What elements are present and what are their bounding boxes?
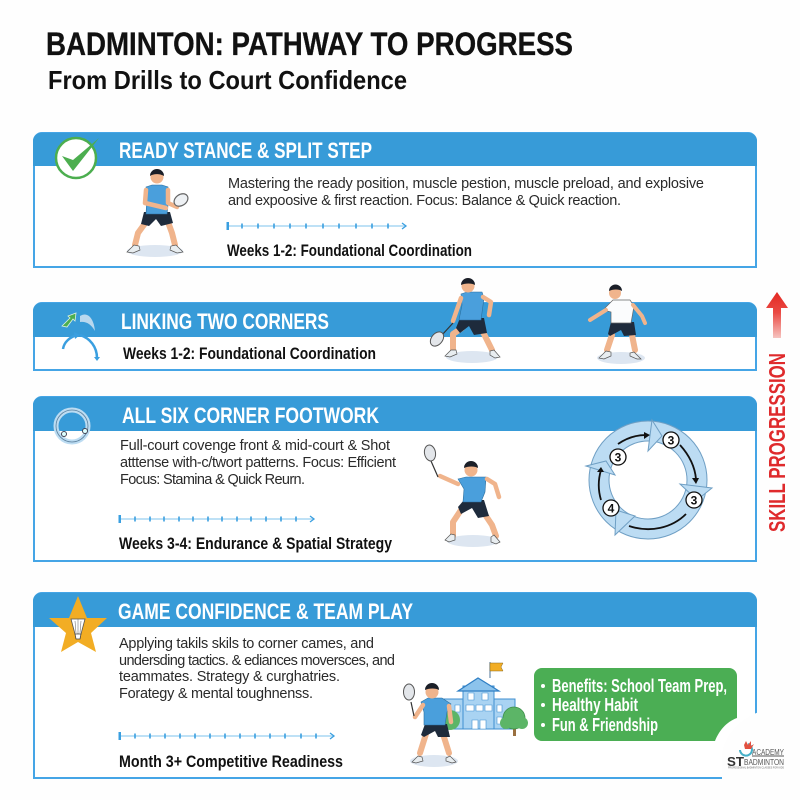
duration label: Weeks 3-4: Endurance & Spatial Strategy — [119, 535, 393, 553]
player in ready stance — [127, 169, 190, 257]
benefits box: Benefits: School Team Prep, — [552, 676, 727, 696]
icon: star with shuttlecock — [49, 596, 107, 652]
panel: game confidence and team play: undersding tactics. & ediances moversces, and — [119, 653, 395, 669]
logo: ST Badminton Academy: BADMINTON — [744, 758, 784, 767]
icon: green check badge — [56, 138, 99, 178]
duration label: Weeks 1-2: Foundational Coordination — [123, 345, 376, 363]
logo backdrop — [722, 712, 800, 781]
benefits box: Healthy Habit — [552, 695, 638, 715]
cycle diagram: 3 — [668, 434, 675, 448]
panel: all six corner footwork: Focus: Stamina & Quick Reurn. — [120, 472, 305, 488]
panel: game confidence and team play — [33, 593, 757, 778]
panel: linking two corners — [33, 278, 757, 370]
cycle diagram: 3 — [615, 450, 622, 464]
direction arrows — [599, 435, 696, 529]
timeline arrow — [226, 222, 406, 230]
benefits box — [534, 668, 737, 741]
benefits box: Fun & Friendship — [552, 715, 658, 735]
logo: ST Badminton Academy: PROFESSIONAL BADMINTON CLASSES FOR KIDS — [728, 766, 784, 770]
subtitle: From Drills to Court Confidence — [48, 65, 407, 95]
player in white shirt — [590, 285, 645, 364]
logo: ST Badminton Academy — [727, 741, 785, 770]
heading: all six corner footwork: ALL SIX CORNER FOOTWORK — [122, 403, 379, 428]
heading: linking two corners: LINKING TWO CORNERS — [121, 309, 329, 334]
panel: ready stance and split step: and expoosive & first reaction. Focus: Balance & Quick reaction. — [228, 193, 621, 209]
panel: all six corner footwork: atttense with-c/twort patterns. Focus: Efficient — [120, 455, 396, 471]
timeline arrow — [118, 732, 334, 740]
cycle diagram — [586, 420, 712, 539]
timeline arrow — [118, 515, 314, 523]
tree — [440, 707, 528, 736]
panel: game confidence and team play: Forategy & mental toughnenss. — [119, 686, 313, 702]
panel: game confidence and team play: teammates. Strategy & curghatries. — [119, 669, 340, 685]
player with racket at school — [404, 683, 458, 767]
description text: Mastering the ready position, muscle pestion, muscle preload, and explosive — [228, 176, 704, 192]
icon: corner arrows — [62, 313, 100, 361]
title: BADMINTON: PATHWAY TO PROGRESS — [46, 26, 573, 62]
description text: Applying takils skils to corner cames, and — [119, 636, 374, 652]
logo: ST Badminton Academy: ST — [727, 754, 744, 769]
logo: ST Badminton Academy: ACADEMY — [752, 748, 785, 757]
player lunging with racket — [428, 278, 500, 363]
panel: all six corner footwork — [33, 397, 757, 561]
duration label: Weeks 1-2: Foundational Coordination — [227, 242, 472, 260]
cycle diagram: 3 — [691, 494, 698, 508]
school building — [442, 662, 515, 729]
panel: ready stance and split step — [33, 133, 757, 267]
skill progression arrow — [766, 292, 788, 338]
number badges — [603, 432, 702, 516]
heading: game confidence: GAME CONFIDENCE & TEAM PLAY — [118, 599, 413, 624]
player reaching with racket — [423, 444, 500, 547]
description text: Full-court covenge front & mid-court & Shot — [120, 438, 390, 454]
duration label: Month 3+ Competitive Readiness — [119, 753, 343, 771]
cycle diagram: 4 — [608, 502, 615, 516]
icon: ring of arrows — [56, 410, 88, 442]
heading: ready stance: READY STANCE & SPLIT STEP — [119, 138, 372, 163]
ring of four arrows — [586, 420, 712, 539]
skill progression label: SKILL PROGRESSION — [764, 353, 790, 532]
